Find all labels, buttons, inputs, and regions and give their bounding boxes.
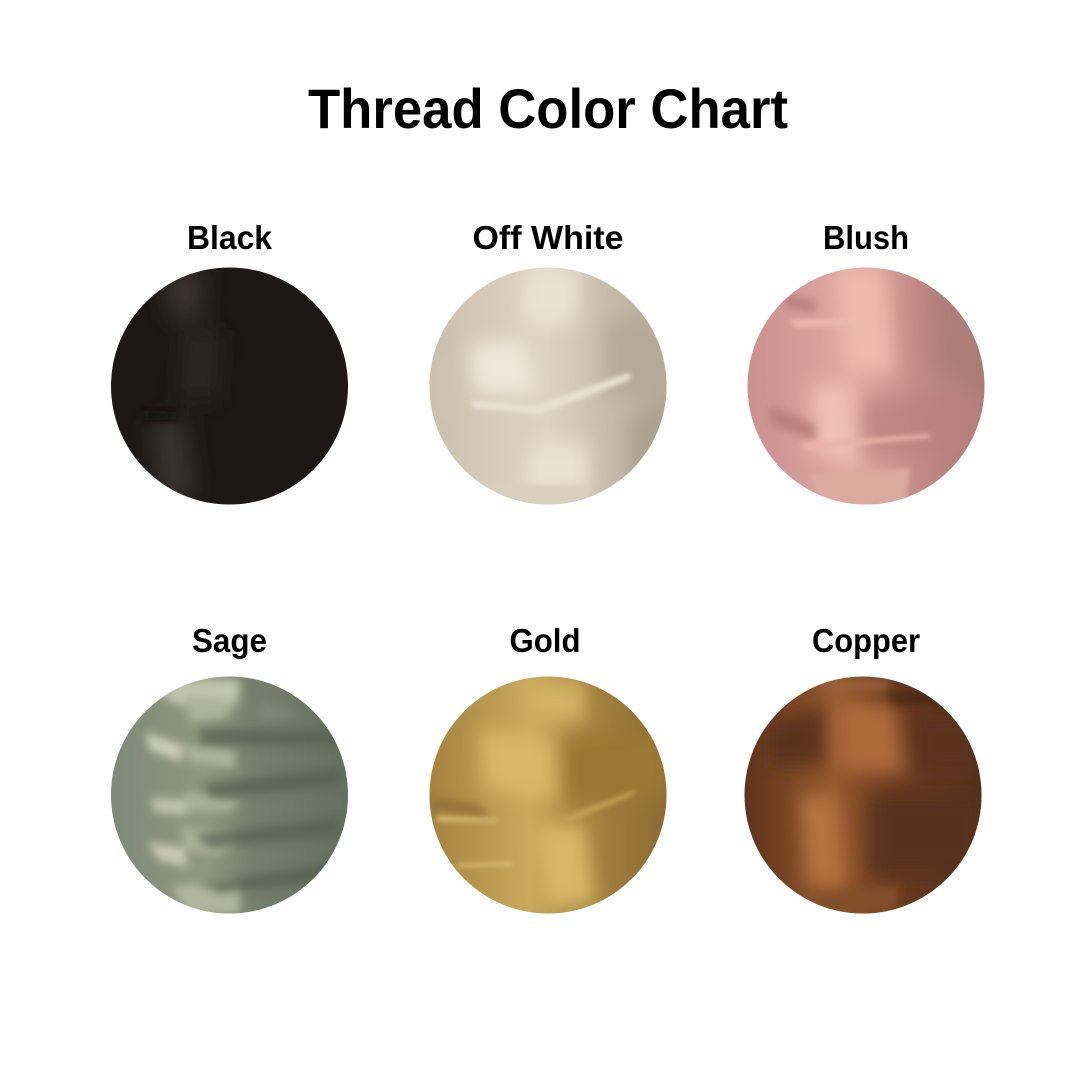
thread circle: Off White (429, 267, 680, 510)
thread circle: Gold (429, 676, 670, 914)
swatch: Blush (747, 219, 985, 505)
thread circle: Black (110, 267, 350, 505)
label: Black: Black (187, 219, 273, 256)
thread circle: Sage (110, 676, 350, 914)
label: Gold: Gold (510, 622, 580, 659)
label: Off White: Off White (472, 219, 624, 256)
swatch: Copper (744, 622, 985, 914)
swatch: Sage (110, 622, 350, 914)
swatch: Gold (429, 622, 670, 914)
swatch: Off White (429, 219, 680, 510)
label: Copper: Copper (812, 622, 920, 659)
thread circle: Blush (747, 267, 985, 505)
label: Blush: Blush (823, 219, 909, 256)
thread circle: Copper (744, 676, 985, 914)
label: Sage: Sage (192, 622, 267, 659)
swatch: Black (110, 219, 350, 505)
title: Thread Color Chart (308, 77, 788, 140)
